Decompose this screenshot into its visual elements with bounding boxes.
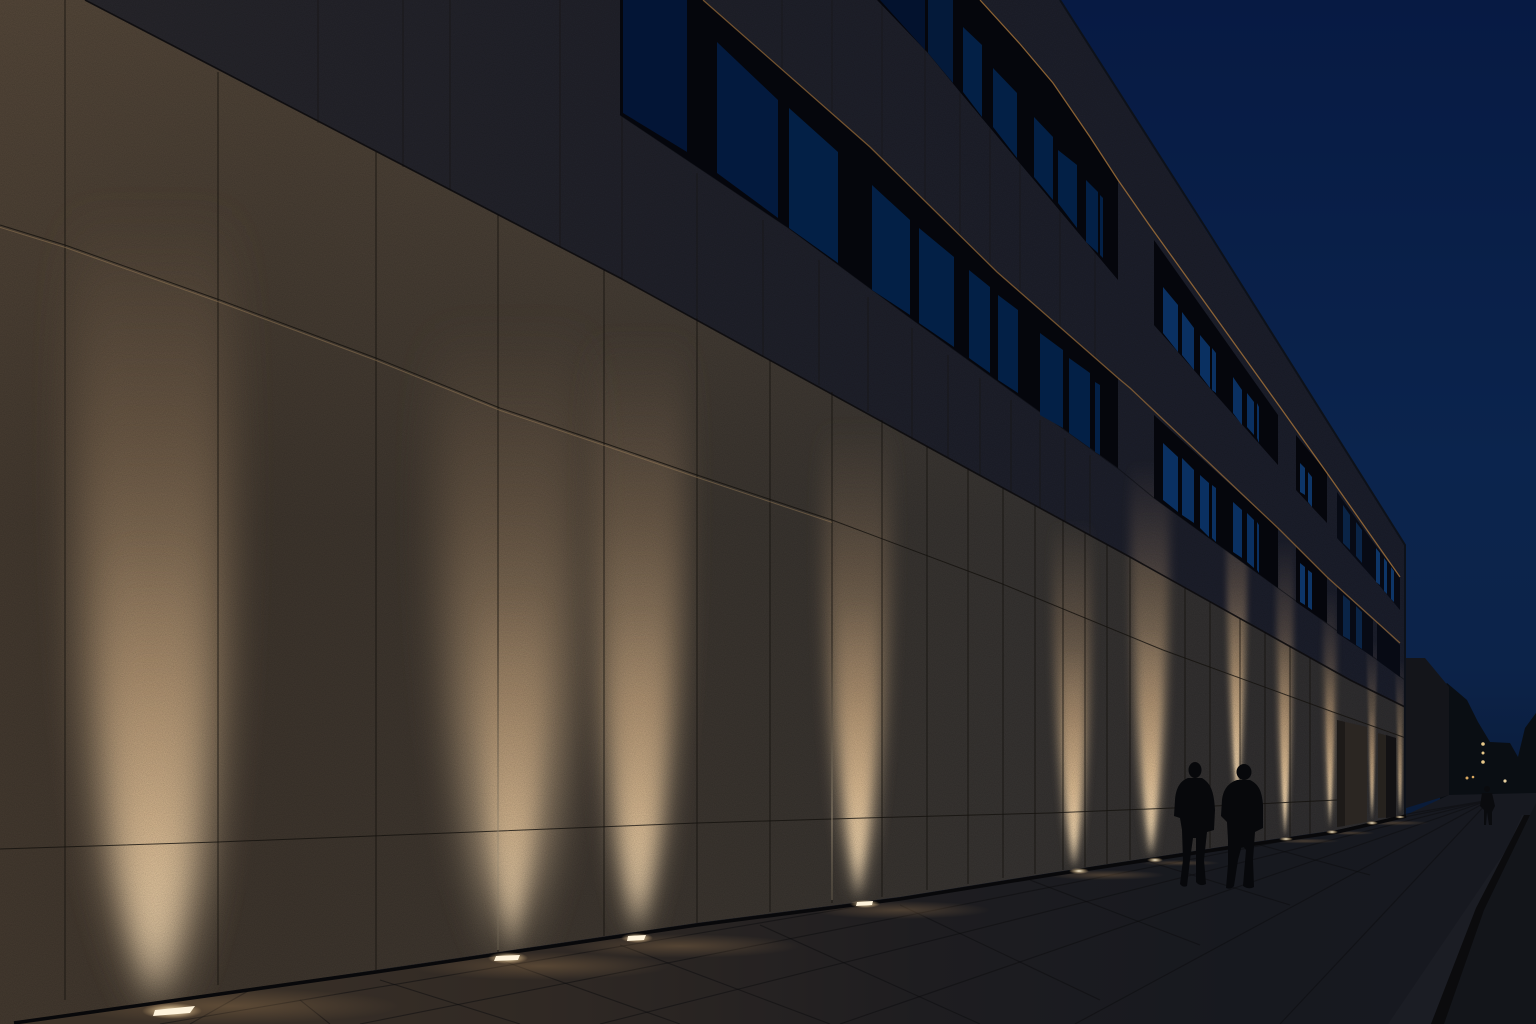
strip beyond the curb [1431, 803, 1536, 1024]
window bands: far right [1296, 435, 1400, 677]
distant trees [1440, 683, 1536, 800]
loading doors [1337, 720, 1396, 827]
silhouette: distant pedestrian [1480, 786, 1495, 825]
unlit upper wall [87, 0, 1404, 706]
dark curb [1431, 815, 1530, 1024]
amber cornice lines [703, 0, 1400, 643]
silhouette: left person [1174, 762, 1215, 887]
silhouette: right person [1221, 764, 1263, 889]
wall base shadow [14, 816, 1406, 1023]
pavement light pools [60, 820, 1430, 1024]
window band: upper left [877, 0, 1118, 280]
window band: lower left [620, 0, 1118, 468]
in-ground lamps [142, 816, 1405, 1019]
roof edge [1060, 0, 1405, 815]
warm wash on upper wall [0, 0, 622, 282]
pavement [14, 793, 1536, 1024]
light beams [72, 200, 1405, 1005]
window bands: middle [1154, 240, 1278, 588]
neighbouring building [1406, 658, 1449, 808]
paler border strip [1388, 815, 1527, 1024]
